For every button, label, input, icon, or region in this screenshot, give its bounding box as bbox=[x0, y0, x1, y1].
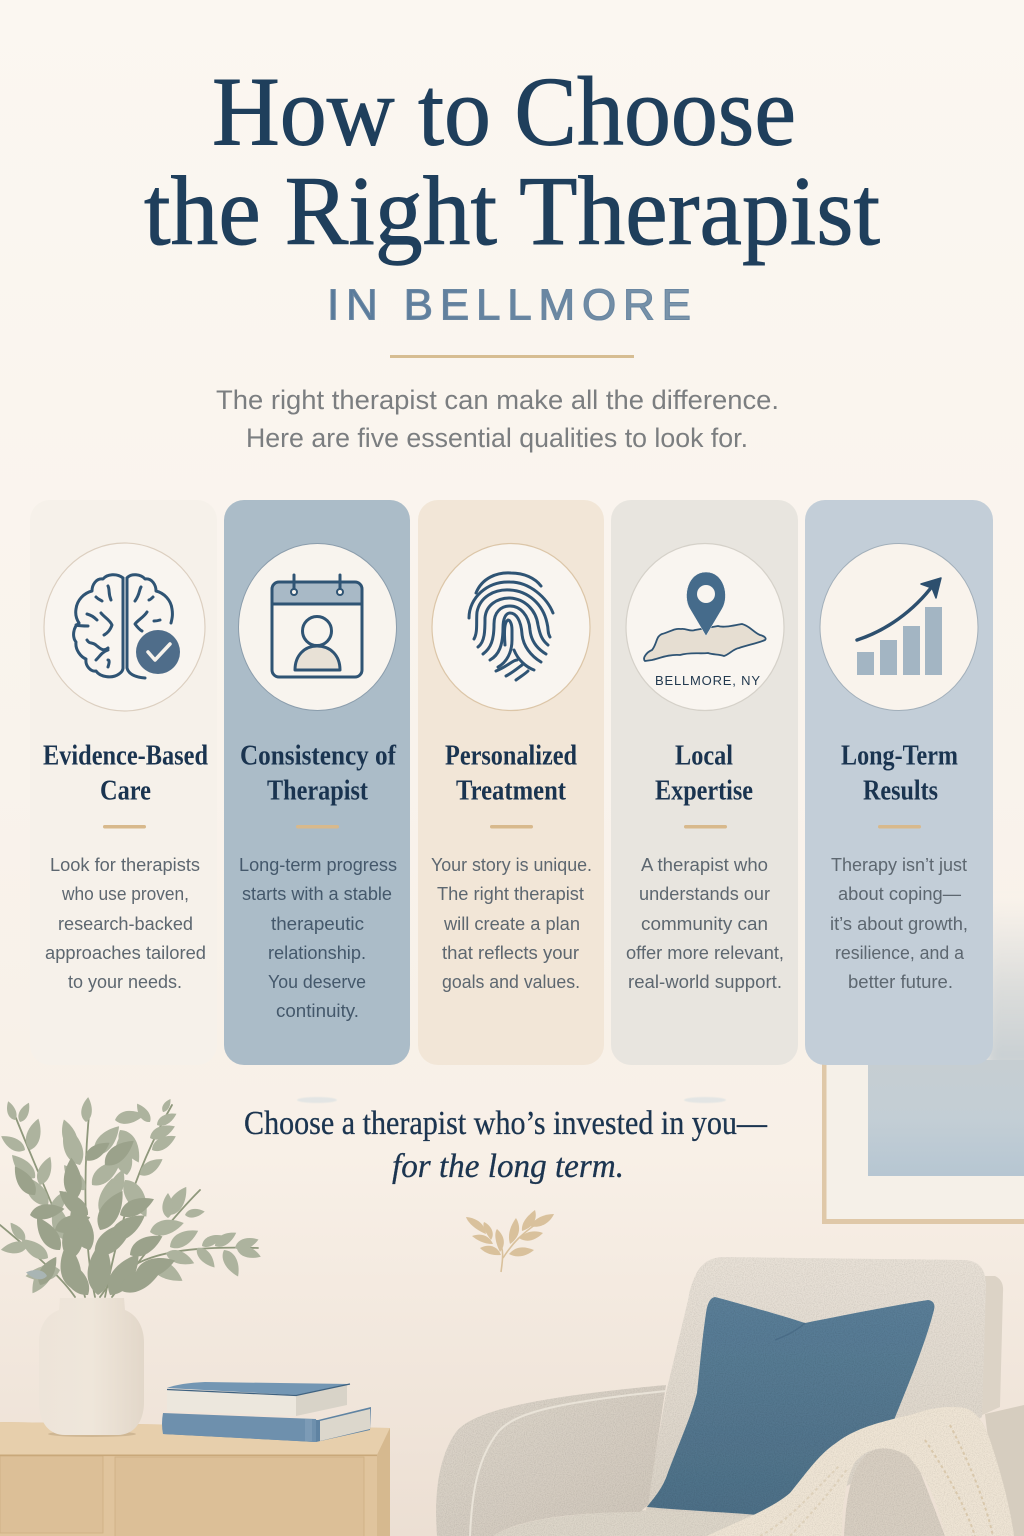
callout text: Choose a therapist who’s invested in you— bbox=[244, 1105, 768, 1142]
heading: Evidence-Based bbox=[43, 740, 208, 772]
body text bbox=[239, 855, 397, 1021]
heading: Expertise bbox=[655, 774, 753, 806]
panel: evidence-based care bbox=[30, 500, 217, 1065]
body text: continuity. bbox=[276, 1001, 359, 1021]
body text: community can bbox=[641, 914, 768, 934]
heading: Consistency of bbox=[240, 740, 396, 772]
seat bbox=[493, 1510, 770, 1536]
intro text: Here are five essential qualities to look for. bbox=[246, 423, 748, 453]
body text: relationship. bbox=[268, 943, 366, 963]
body text: starts with a stable bbox=[242, 884, 392, 904]
heading: Results bbox=[863, 774, 938, 806]
body text: research-backed bbox=[58, 914, 193, 934]
body text: A therapist who bbox=[641, 855, 768, 875]
heading: Care bbox=[100, 774, 151, 806]
body text: better future. bbox=[848, 972, 953, 992]
body text bbox=[830, 855, 968, 992]
body text: that reflects your bbox=[442, 943, 579, 963]
right arm bbox=[844, 1405, 1024, 1536]
body text: offer more relevant, bbox=[626, 943, 784, 963]
body text bbox=[626, 855, 784, 992]
heading bbox=[240, 740, 396, 806]
title bbox=[144, 58, 880, 266]
body text: Look for therapists bbox=[50, 855, 200, 875]
intro text bbox=[216, 385, 779, 453]
framed art bbox=[822, 1060, 1024, 1224]
panel: local expertise bbox=[611, 500, 798, 1065]
heading bbox=[43, 740, 208, 806]
plant bbox=[0, 1097, 263, 1301]
icon: calendar with person bbox=[238, 544, 396, 710]
body text: it’s about growth, bbox=[830, 914, 968, 934]
left arm bbox=[436, 1385, 666, 1536]
heading: Personalized bbox=[445, 740, 577, 772]
title: the Right Therapist bbox=[144, 157, 880, 266]
chair back bbox=[646, 1257, 1003, 1520]
body text bbox=[45, 855, 206, 992]
subtitle: in Bellmore: IN BELLMORE bbox=[327, 280, 691, 330]
icon: map pin over Long Island: BELLMORE, NY bbox=[655, 673, 760, 688]
icon: brain with check bbox=[44, 543, 205, 711]
body text: real-world support. bbox=[628, 972, 782, 992]
body text: will create a plan bbox=[443, 914, 580, 934]
panel: consistency of therapist bbox=[224, 500, 410, 1065]
icon: fingerprint bbox=[432, 544, 590, 710]
heading: Treatment bbox=[456, 774, 566, 806]
heading bbox=[655, 740, 753, 806]
blue pillow bbox=[647, 1297, 934, 1516]
sideboard bbox=[0, 1422, 390, 1536]
title: How to Choose bbox=[212, 58, 796, 166]
icon: rising bar chart with arrow bbox=[820, 544, 978, 710]
body text: Your story is unique. bbox=[431, 855, 592, 875]
icon: gold leaf sprig bbox=[466, 1210, 554, 1272]
heading bbox=[445, 740, 577, 806]
body text: about coping— bbox=[838, 884, 961, 904]
panel: personalized treatment bbox=[418, 500, 604, 1065]
books bbox=[162, 1382, 371, 1442]
body text: You deserve bbox=[268, 972, 366, 992]
icon: map pin over Long Island bbox=[626, 544, 784, 710]
callout text bbox=[244, 1105, 768, 1185]
body text: approaches tailored bbox=[45, 943, 206, 963]
heading: Therapist bbox=[267, 774, 368, 806]
body text: resilience, and a bbox=[835, 943, 965, 963]
body text: Therapy isn’t just bbox=[831, 855, 967, 875]
heading bbox=[841, 740, 958, 806]
vase bbox=[39, 1298, 144, 1437]
callout text: for the long term. bbox=[392, 1148, 624, 1185]
armchair bbox=[436, 1257, 1024, 1536]
heading: Long-Term bbox=[841, 740, 958, 772]
intro text: The right therapist can make all the difference. bbox=[216, 385, 779, 415]
gold divider bbox=[390, 355, 634, 358]
heading: Local bbox=[675, 740, 733, 772]
panel: long-term results bbox=[805, 500, 993, 1065]
body text: understands our bbox=[639, 884, 770, 904]
cream throw bbox=[707, 1407, 1014, 1536]
body text: therapeutic bbox=[271, 914, 364, 934]
body text: goals and values. bbox=[442, 972, 580, 992]
body text bbox=[431, 855, 592, 992]
body text: Long-term progress bbox=[239, 855, 397, 875]
body text: The right therapist bbox=[437, 884, 584, 904]
body text: to your needs. bbox=[68, 972, 182, 992]
body text: who use proven, bbox=[61, 884, 189, 904]
